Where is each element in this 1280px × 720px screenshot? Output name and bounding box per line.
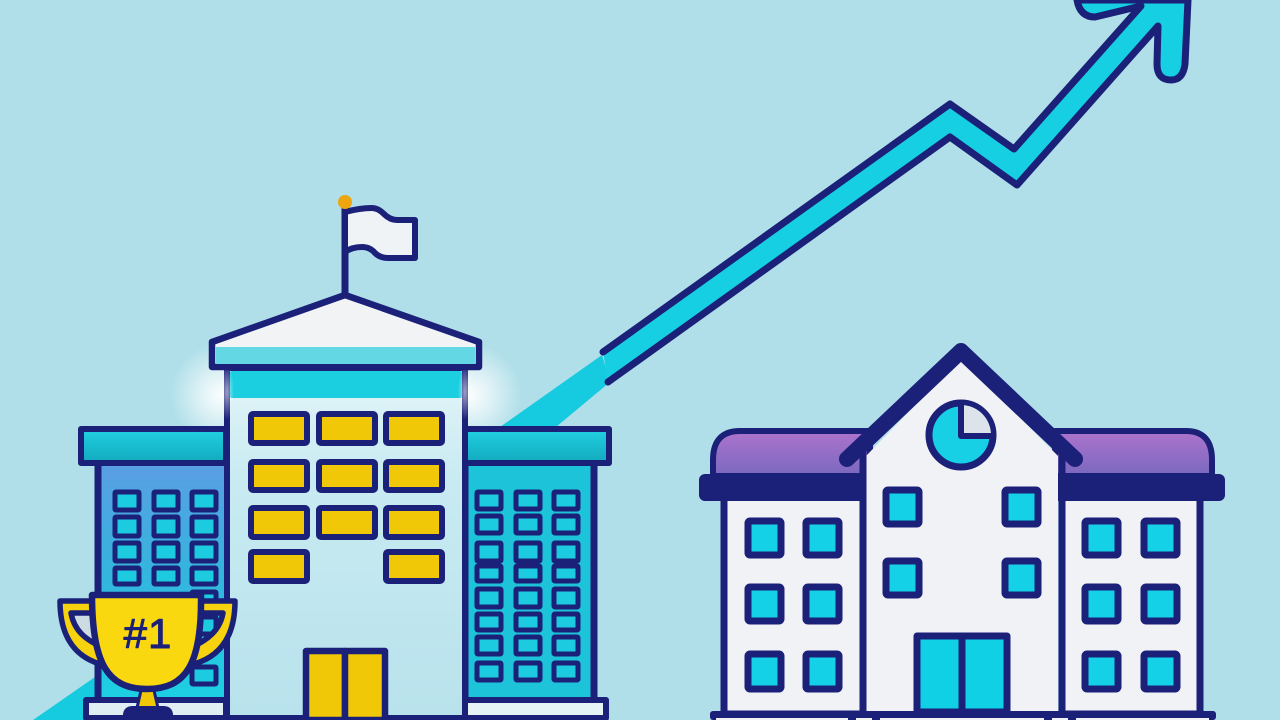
glow behind main building xyxy=(170,343,522,447)
trophy label: #1 xyxy=(124,610,172,657)
arrow upper outlined section xyxy=(603,0,1188,382)
trophy handle gap xyxy=(70,613,98,650)
flag xyxy=(338,195,415,295)
arrow lower ribbon xyxy=(33,677,95,720)
right wing xyxy=(465,429,609,718)
door xyxy=(917,636,1007,712)
trophy cup xyxy=(92,595,201,689)
trophy xyxy=(60,595,235,720)
center tower xyxy=(220,364,472,718)
blue windows xyxy=(748,490,1177,689)
main school building xyxy=(81,195,609,720)
left wing xyxy=(81,429,228,718)
trophy stem and base xyxy=(137,686,158,708)
trophy handles xyxy=(60,601,104,664)
door xyxy=(306,651,385,720)
roof band xyxy=(699,474,1225,501)
side wings xyxy=(724,490,1200,714)
second school building xyxy=(699,351,1225,720)
purple roofs xyxy=(713,431,1212,476)
base xyxy=(710,711,1216,720)
clock xyxy=(929,403,993,467)
roof xyxy=(212,295,479,367)
central gable xyxy=(847,351,1075,712)
base line xyxy=(85,717,608,720)
yellow windows xyxy=(251,414,442,581)
